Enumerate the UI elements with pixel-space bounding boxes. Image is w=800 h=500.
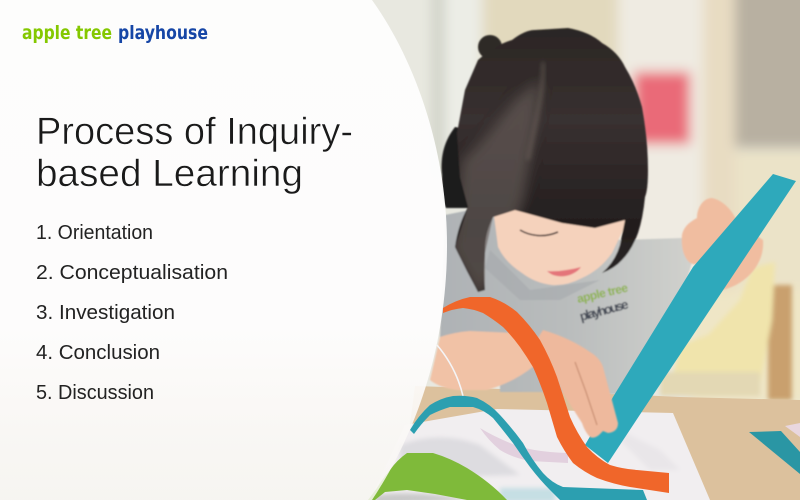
back hair [442,127,470,208]
step 1: 1. Orientation [36,222,153,244]
orange ribbon [443,297,669,493]
shirt logo text [576,281,630,324]
shirt collar shadow [485,250,600,300]
paper shadows [375,420,680,500]
logo [22,22,208,44]
step 3: 3. Investigation [36,302,175,324]
hair bun [478,35,502,59]
logo: playhouse: playhouse [118,22,208,44]
shirt logo text: apple tree [576,281,630,306]
child's left arm [430,331,545,390]
hair [455,28,648,292]
title: based Learning [36,153,303,195]
step 4: 4. Conclusion [36,342,160,364]
step 5: 5. Discussion [36,382,154,404]
blue ribbon held upright [585,174,796,463]
photo: table top [400,386,800,500]
logo: apple tree: apple tree [22,22,112,44]
photo: sheet of white paper [370,409,710,500]
closed eye [520,230,558,236]
lower blue ribbon [410,396,647,500]
pale pink ribbon [480,428,568,463]
child's raised hand and forearm [682,198,763,290]
title: Process of Inquiry- [36,111,353,153]
table card: pale pink piece [785,423,800,437]
hair brown-grey left section [450,80,540,300]
mouth [547,267,581,276]
photo: yellow chair and table leg [660,262,792,400]
grey shirt [440,205,692,395]
child's hand on the paper [530,330,618,438]
green ribbon [368,453,507,500]
child figure [430,28,763,395]
finger gap [575,362,597,425]
shirt logo text: playhouse [578,296,630,324]
title [36,111,353,195]
hair parting highlight [528,62,543,160]
list of process steps [36,222,228,404]
translucent white curved panel [0,0,447,500]
face [492,200,628,285]
table card: teal piece [749,431,800,474]
thin white ribbon [437,345,463,396]
step 2: 2. Conceptualisation [36,262,228,284]
